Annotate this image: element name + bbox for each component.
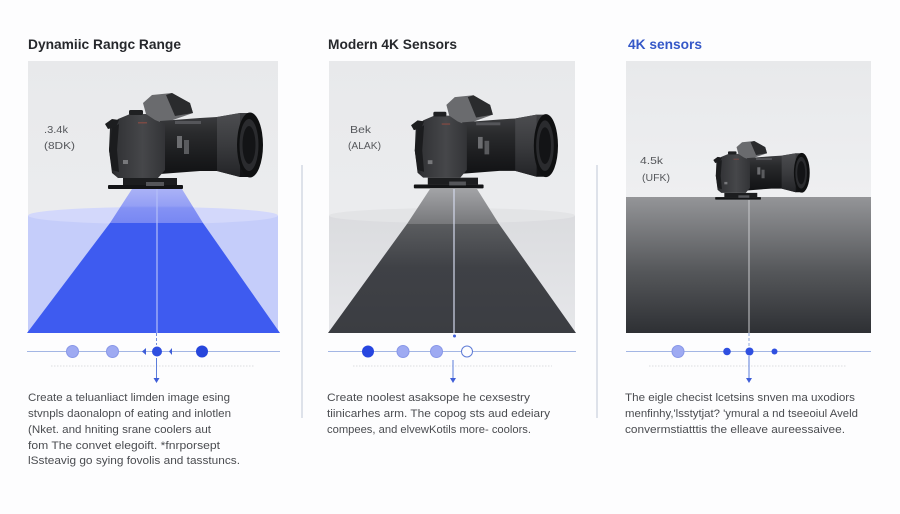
resolution label: (UFK) bbox=[642, 172, 670, 184]
grey range band bbox=[329, 208, 575, 333]
icon: camera bbox=[713, 141, 810, 200]
image panel background bbox=[329, 61, 575, 333]
description text: compees, and elvewKotils more- coolors. bbox=[327, 424, 531, 436]
description text: lSsteavig go sying fovolis and tasstuncs. bbox=[28, 455, 240, 467]
blue light cone bbox=[27, 189, 280, 333]
resolution label bbox=[44, 124, 75, 152]
description text: fom The convet elegoift. *fnrporsept bbox=[28, 440, 220, 452]
resolution label bbox=[640, 155, 670, 184]
timeline scale bbox=[626, 333, 871, 383]
axis line bbox=[748, 200, 750, 333]
description text: Create a teluanliact limden image esing bbox=[28, 392, 230, 404]
resolution label: (8DK) bbox=[44, 140, 75, 152]
panel: modern 4K sensors bbox=[327, 36, 576, 436]
title: dynamic range: Dynamiic Rangc Range bbox=[28, 36, 181, 52]
timeline scale bbox=[328, 334, 576, 383]
light blue range band bbox=[28, 207, 278, 333]
description text: stvnpls daonalopn of eating and inlotlen bbox=[28, 408, 231, 420]
axis line bbox=[156, 189, 158, 333]
image panel background bbox=[28, 61, 278, 333]
axis line bbox=[453, 189, 455, 333]
description text: The eigle checist lcetsins snven ma uxodiors bbox=[625, 392, 856, 404]
title: 4K sensors: 4K sensors bbox=[628, 36, 702, 52]
timeline scale bbox=[27, 333, 280, 383]
resolution label: .3.4k bbox=[44, 124, 69, 136]
description text: tiinicarhes arm. The copog sts aud edeiary bbox=[327, 408, 551, 420]
resolution label: Bek bbox=[350, 124, 372, 136]
dark floor bbox=[626, 197, 871, 333]
divider bbox=[301, 165, 303, 418]
resolution label bbox=[348, 124, 381, 152]
description text: convermstiatttis the elleave aureessaivee. bbox=[625, 424, 845, 436]
panel: dynamic range bbox=[27, 36, 280, 467]
description text bbox=[327, 392, 551, 436]
icon: camera bbox=[105, 93, 263, 189]
description text bbox=[625, 392, 858, 436]
resolution label: (ALAK) bbox=[348, 140, 381, 152]
description text: Create noolest asaksope he cexsestry bbox=[327, 392, 531, 404]
description text: (Nket. and hniting srane coolers aut bbox=[28, 424, 211, 436]
grey light cone bbox=[328, 189, 576, 333]
title: modern 4K sensors: Modern 4K Sensors bbox=[328, 36, 457, 52]
image panel background bbox=[626, 61, 871, 197]
description text bbox=[28, 392, 240, 467]
description text: menfinhy,'lsstytjat? 'ymural a nd tseeoiul Aveld bbox=[625, 408, 858, 420]
resolution label: 4.5k bbox=[640, 155, 664, 167]
panel: 4K sensors bbox=[625, 36, 871, 436]
divider bbox=[596, 165, 598, 418]
icon: camera bbox=[411, 95, 558, 188]
